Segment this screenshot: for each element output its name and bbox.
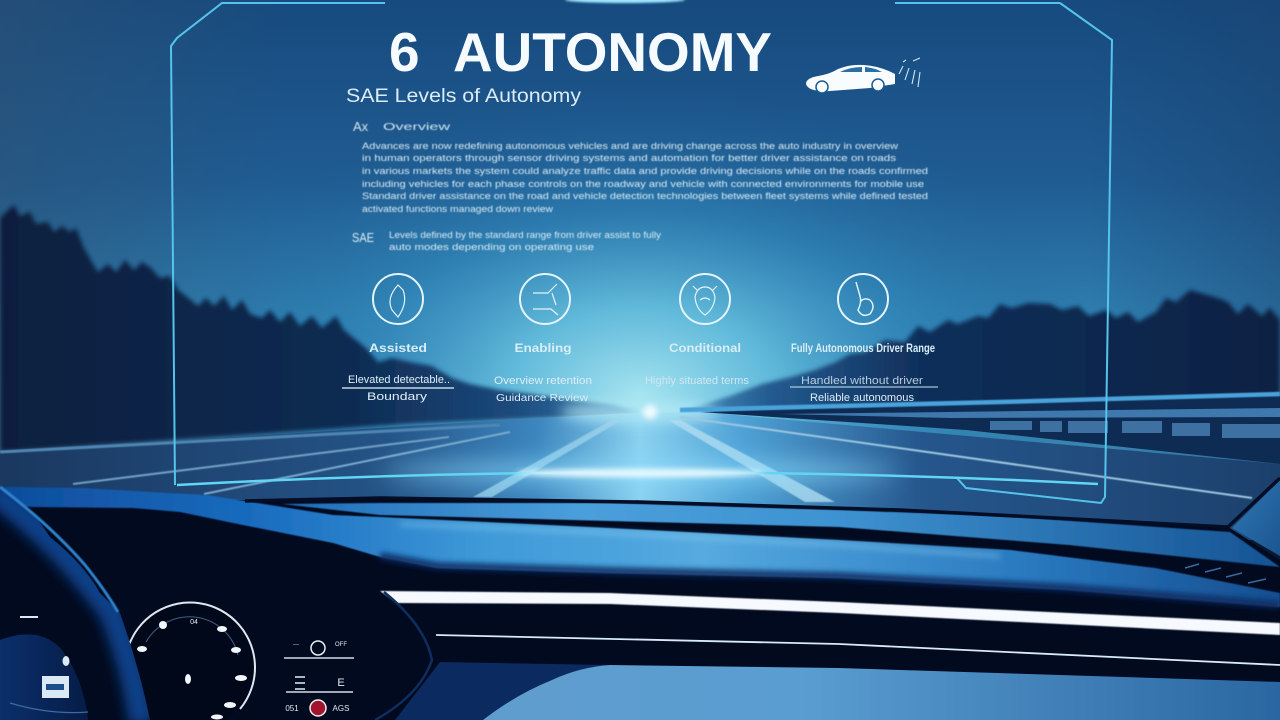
thin light strip bbox=[436, 635, 1280, 665]
info display: --- bbox=[293, 642, 299, 648]
level column 2 bbox=[494, 274, 592, 404]
level column 3 bbox=[645, 274, 749, 387]
description: Reliable autonomous bbox=[810, 392, 914, 404]
info display bbox=[284, 641, 354, 716]
navy area left of lower panel bbox=[395, 662, 610, 720]
horizon glow bbox=[560, 400, 720, 424]
title: 6 bbox=[389, 21, 420, 83]
info display: 051 bbox=[285, 704, 299, 713]
body paragraph: in human operators through sensor driving systems and automation for better driver assistance on roads bbox=[362, 153, 897, 163]
section heading: Overview bbox=[383, 122, 451, 133]
note block bbox=[352, 230, 662, 252]
cluster hood bbox=[375, 592, 432, 720]
screen readout bbox=[42, 676, 69, 698]
speedometer gauge bbox=[126, 603, 255, 720]
tree line left bbox=[0, 205, 640, 452]
icon: system bbox=[680, 274, 730, 324]
title: AUTONOMY bbox=[453, 21, 772, 83]
upper lit strip bbox=[282, 503, 1280, 567]
note block: SAE bbox=[352, 230, 374, 245]
hud top glow bbox=[565, 0, 685, 3]
main dash band bbox=[0, 487, 1280, 607]
label: Fully Autonomous Driver Range bbox=[791, 341, 935, 355]
subtitle: SAE Levels of Autonomy bbox=[346, 86, 582, 107]
road markings bbox=[0, 417, 1252, 502]
icon: car bbox=[806, 58, 920, 93]
description bbox=[790, 375, 938, 404]
tree line right bbox=[680, 290, 1280, 420]
icon: autonomy bbox=[838, 274, 888, 324]
info display: OFF bbox=[335, 642, 347, 648]
description: Elevated detectable.. bbox=[348, 374, 450, 386]
body paragraph: in various markets the system could analyze traffic data and provide driving decisions while on the roads confirmed bbox=[362, 166, 928, 176]
sky background bbox=[0, 0, 1280, 520]
dashboard bbox=[0, 478, 1280, 720]
rim highlight bbox=[0, 487, 118, 612]
instrument screen bbox=[0, 634, 88, 720]
rim shading bbox=[0, 490, 142, 720]
band shadow bbox=[380, 556, 1280, 605]
description: Highly situated terms bbox=[645, 375, 749, 387]
band highlight bbox=[400, 524, 1000, 556]
speedometer gauge: 04 bbox=[190, 619, 198, 626]
section heading: Ax bbox=[353, 119, 369, 134]
windscreen edge bbox=[245, 478, 1280, 527]
description: Guidance Review bbox=[496, 393, 589, 404]
info display: AGS bbox=[333, 704, 349, 713]
description bbox=[342, 374, 454, 403]
body paragraph bbox=[362, 141, 928, 214]
hud bottom light bar bbox=[177, 463, 1098, 485]
icon: sensor bbox=[373, 274, 423, 324]
lower panel bbox=[483, 665, 1280, 720]
description: Handled without driver bbox=[801, 375, 923, 387]
info display: E bbox=[337, 677, 345, 689]
note block: Levels defined by the standard range from driver assist to fully bbox=[389, 230, 662, 240]
label: Conditional bbox=[669, 341, 741, 355]
description bbox=[494, 375, 592, 404]
steering wheel bbox=[0, 487, 150, 720]
icon: steering logic bbox=[520, 274, 570, 324]
body paragraph: Standard driver assistance on the road and vehicle detection technologies between fleet systems while defined tested bbox=[362, 191, 928, 201]
body paragraph: activated functions managed down review bbox=[362, 204, 554, 214]
white light strip bbox=[380, 591, 1280, 635]
wheel rim bbox=[0, 487, 150, 720]
distant headlight bbox=[643, 405, 657, 419]
hud frame bbox=[171, 3, 1112, 503]
label: Assisted bbox=[369, 341, 427, 355]
body paragraph: including vehicles for each phase controls on the roadway and vehicle with connected environments for mobile use bbox=[362, 179, 924, 189]
level column 4 bbox=[790, 274, 938, 404]
description: Boundary bbox=[367, 391, 428, 403]
vent slats bbox=[1185, 564, 1266, 583]
section heading bbox=[353, 119, 451, 134]
right corner trim bbox=[1232, 480, 1280, 556]
road bbox=[0, 394, 1280, 540]
dash base bbox=[0, 498, 1280, 720]
level column 1 bbox=[342, 274, 454, 403]
description: Overview retention bbox=[494, 375, 592, 387]
label: Enabling bbox=[514, 341, 572, 355]
body paragraph: Advances are now redefining autonomous vehicles and are driving change across the auto industry in overview bbox=[362, 141, 899, 151]
note block: auto modes depending on operating use bbox=[389, 242, 594, 252]
guardrail bbox=[680, 394, 1280, 464]
